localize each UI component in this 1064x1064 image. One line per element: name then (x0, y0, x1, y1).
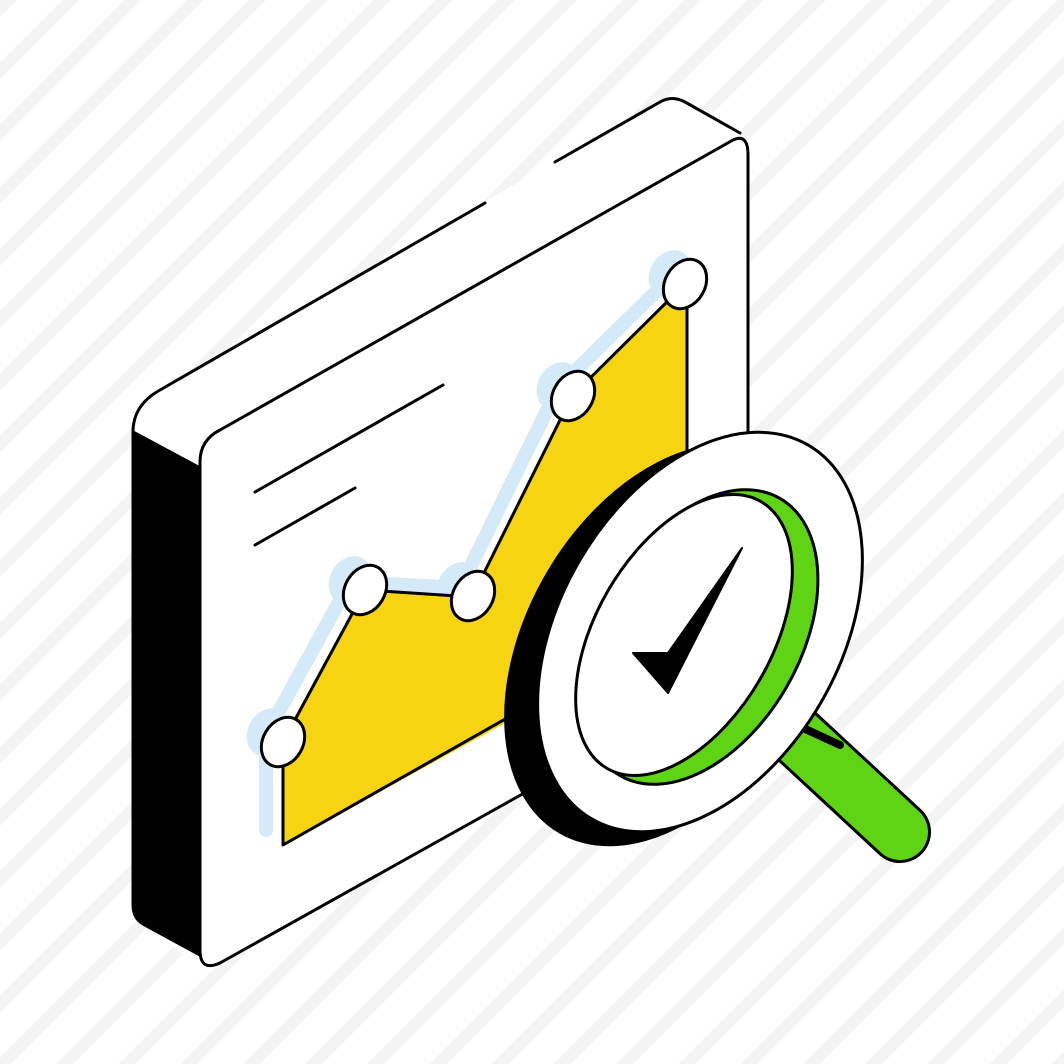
board outer top edge with gap (133, 98, 740, 432)
handle (790, 722, 900, 832)
magnifier (439, 375, 929, 902)
lens inner rim (green) (533, 448, 867, 826)
board front face (200, 138, 748, 966)
lens outer ring (white) (471, 375, 929, 889)
chart area (yellow) (283, 284, 688, 845)
board back body (133, 98, 748, 967)
board: chart panel (133, 98, 748, 967)
chart area outlines (283, 284, 687, 845)
text lines on board (255, 385, 443, 545)
lens depth (black) (439, 388, 897, 902)
chart shadow (light blue) (266, 276, 672, 830)
lens glass (white) (531, 458, 837, 812)
chart data points (253, 251, 715, 775)
icon: checkmark (633, 548, 742, 693)
board left side (black) (133, 432, 200, 955)
